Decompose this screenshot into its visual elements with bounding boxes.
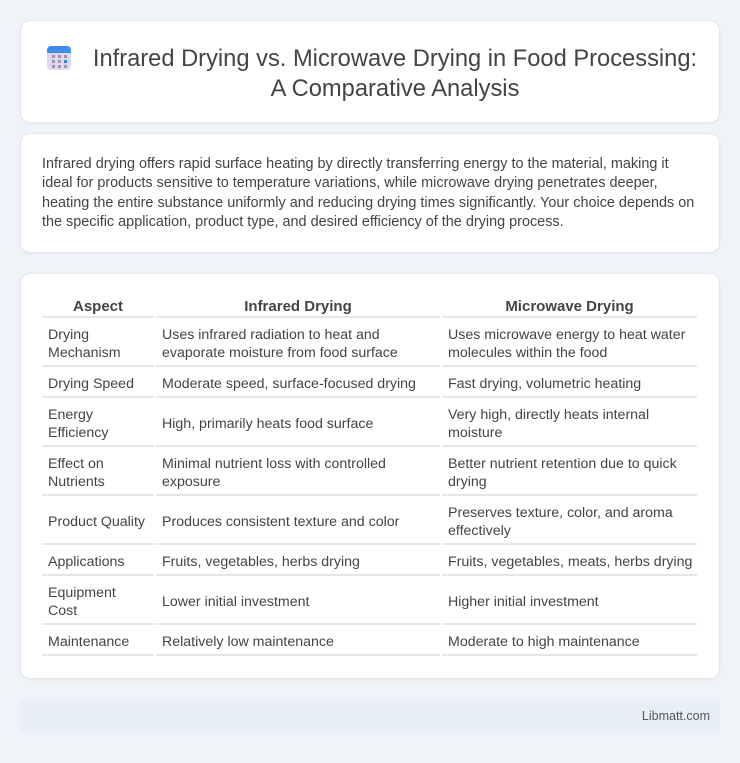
cell: Moderate to high maintenance <box>448 634 640 650</box>
cell <box>442 627 697 656</box>
row: Effect on Nutrients: Nutrients <box>48 474 105 490</box>
intro panel <box>20 133 720 253</box>
row: Equipment Cost <box>42 578 154 625</box>
header: Aspect: Aspect <box>73 298 123 315</box>
cell <box>442 369 697 398</box>
cell: Preserves texture, color, and aroma <box>448 504 673 520</box>
cell <box>442 449 697 496</box>
row: Product Quality: Product Quality <box>48 514 145 530</box>
row: Product Quality <box>42 498 154 545</box>
row: Equipment Cost: Equipment <box>48 584 116 600</box>
cell <box>442 547 697 576</box>
cell: Minimal nutrient loss with controlled <box>162 456 386 472</box>
row: Effect on Nutrients <box>42 449 154 496</box>
cell: Lower initial investment <box>162 594 309 610</box>
row: Drying Mechanism: Mechanism <box>48 344 121 360</box>
cell <box>442 400 697 447</box>
cell <box>442 498 697 545</box>
cell <box>442 578 697 625</box>
cell: High, primarily heats food surface <box>162 416 373 432</box>
cell: Fruits, vegetables, meats, herbs drying <box>448 554 692 570</box>
cell <box>156 578 440 625</box>
cell: evaporate moisture from food surface <box>162 344 398 360</box>
cell: Uses infrared radiation to heat and <box>162 326 380 342</box>
icon: calendar grid <box>47 46 71 70</box>
header: Aspect <box>42 298 154 318</box>
title: Infrared Drying vs. Microwave Drying in Food Processing: <box>93 46 697 72</box>
row: Drying Mechanism: Drying <box>48 326 89 342</box>
cell: Higher initial investment <box>448 594 599 610</box>
cell: effectively <box>448 522 511 538</box>
cell: Produces consistent texture and color <box>162 514 399 530</box>
row: Energy Efficiency <box>42 400 154 447</box>
cell <box>156 627 440 656</box>
cell: molecules within the food <box>448 344 607 360</box>
cell: drying <box>448 474 487 490</box>
row: Drying Mechanism <box>42 320 154 367</box>
row: Energy Efficiency: Energy <box>48 406 93 422</box>
intro text: the specific application, product type, and desired efficiency of the drying process. <box>42 214 564 230</box>
cell: exposure <box>162 474 220 490</box>
row: Energy Efficiency: Efficiency <box>48 424 108 440</box>
row: Applications: Applications <box>48 554 125 570</box>
intro text: ideal for products sensitive to temperature variations, while microwave drying penetrates deeper, <box>42 175 658 191</box>
row: Maintenance <box>42 627 154 656</box>
cell: Fruits, vegetables, herbs drying <box>162 554 360 570</box>
cell <box>156 320 440 367</box>
intro text <box>42 156 694 230</box>
cell <box>156 400 440 447</box>
row: Drying Speed: Drying Speed <box>48 376 134 392</box>
cell: Very high, directly heats internal <box>448 406 649 422</box>
header: Microwave Drying: Microwave Drying <box>505 298 634 315</box>
cell <box>156 449 440 496</box>
cell <box>156 369 440 398</box>
cell: Uses microwave energy to heat water <box>448 326 685 342</box>
row: Applications <box>42 547 154 576</box>
header panel <box>20 20 720 123</box>
footer bar <box>20 699 720 733</box>
row: Drying Speed <box>42 369 154 398</box>
row: Effect on Nutrients: Effect on <box>48 456 104 472</box>
intro text: Infrared drying offers rapid surface heating by directly transferring energy to the material, making it <box>42 156 669 172</box>
row: Maintenance: Maintenance <box>48 634 129 650</box>
cell <box>156 498 440 545</box>
cell: Moderate speed, surface-focused drying <box>162 376 416 392</box>
cell <box>156 547 440 576</box>
title <box>93 46 697 102</box>
cell: Better nutrient retention due to quick <box>448 456 677 472</box>
cell: Fast drying, volumetric heating <box>448 376 641 392</box>
cell: Relatively low maintenance <box>162 634 334 650</box>
header: Infrared Drying <box>156 298 440 318</box>
intro text: heating the entire substance uniformly and reducing drying times significantly. Your choice depends on <box>42 195 694 211</box>
cell <box>442 320 697 367</box>
table panel <box>20 273 720 679</box>
header: Infrared Drying: Infrared Drying <box>244 298 352 315</box>
row: Equipment Cost: Cost <box>48 602 77 618</box>
title: A Comparative Analysis <box>271 76 519 102</box>
cell: moisture <box>448 424 502 440</box>
header: Microwave Drying <box>442 298 697 318</box>
footer brand: Libmatt.com <box>642 709 710 723</box>
